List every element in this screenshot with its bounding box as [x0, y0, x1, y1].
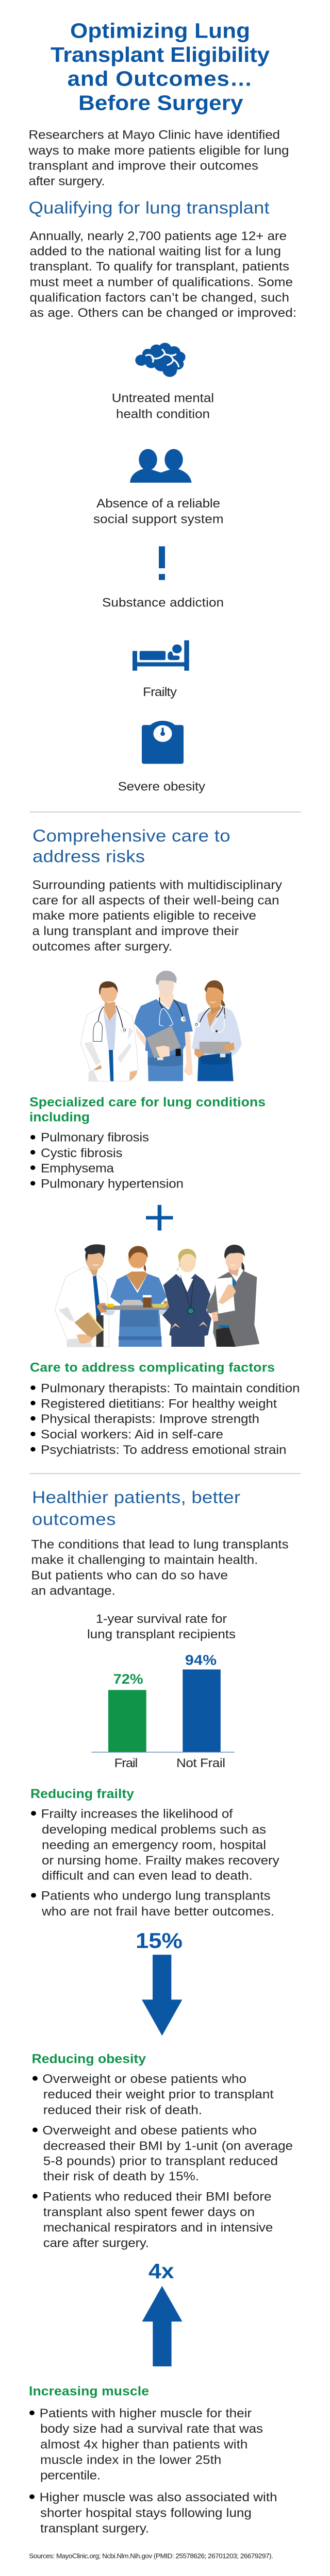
panel: qualifying for lung transplant — [29, 198, 296, 793]
list: lung conditions: Pulmonary hypertension — [41, 1177, 184, 1191]
text block: multidisciplinary care: outcomes after surgery. — [32, 940, 172, 954]
list: care team — [30, 1381, 300, 1457]
illustration: three clinicians — [81, 971, 241, 1081]
text block: multidisciplinary care — [32, 878, 282, 954]
list: reducing obesity: care after surgery. — [43, 2236, 149, 2250]
value: 72 percent: 72% — [113, 1671, 143, 1687]
text block: qualifying: transplant. To qualify for transplant, patients — [30, 260, 289, 274]
illustration: four care team members — [55, 1244, 259, 1347]
text block: qualifying — [30, 229, 296, 320]
text block: multidisciplinary care: make more patients eligible to receive — [32, 909, 256, 923]
icon: bed — [133, 640, 189, 671]
title: Optimizing Lung — [70, 19, 250, 42]
list: reducing obesity: decreased their BMI by 1-unit (on average — [43, 2139, 293, 2153]
list: reducing obesity: mechanical respirators and in intensive — [43, 2221, 273, 2234]
list: care team: Physical therapists: Improve strength — [41, 1412, 259, 1426]
text block: qualifying: must meet a number of qualifications. Some — [30, 276, 293, 289]
list: reducing frailty: needing an emergency room, hospital — [42, 1838, 266, 1852]
list: lung conditions: Pulmonary fibrosis — [41, 1130, 149, 1144]
bar chart: survival rate — [87, 1612, 236, 1770]
subheading: specialized care: including — [29, 1110, 90, 1124]
label: severe obesity: Severe obesity — [118, 779, 205, 793]
title: Before Surgery — [78, 91, 243, 114]
doctor in white coat — [81, 981, 138, 1081]
intro text: after surgery. — [29, 175, 105, 188]
list: increasing muscle: shorter hospital stays following lung — [40, 2506, 252, 2520]
list: increasing muscle: percentile. — [40, 2468, 101, 2482]
list: care team: Registered dietitians: For healthy weight — [41, 1397, 277, 1411]
label: substance addiction: Substance addiction — [102, 596, 224, 609]
heading: comprehensive care: Comprehensive care to — [32, 826, 230, 845]
panel: comprehensive care — [29, 826, 300, 1457]
text block: qualifying: qualification factors can’t be changed, such — [30, 291, 289, 304]
title — [51, 19, 270, 114]
heading: healthier patients — [32, 1488, 240, 1529]
label: social support: Absence of a reliable — [96, 497, 220, 511]
list: reducing frailty: difficult and can even lead to death. — [42, 1869, 253, 1883]
list: reducing obesity: Overweight and obese patients who — [42, 2124, 257, 2138]
list: increasing muscle — [29, 2406, 277, 2535]
list: lung conditions — [30, 1130, 184, 1191]
subheading: reducing obesity: Reducing obesity — [32, 2052, 146, 2066]
label: mental health — [112, 391, 214, 421]
heading: healthier patients: outcomes — [32, 1510, 116, 1529]
list: reducing frailty — [31, 1807, 279, 1919]
text block: multidisciplinary care: care for all aspects of their well-being can — [32, 893, 279, 907]
icon: exclamation mark — [159, 546, 165, 580]
arrow: up — [142, 2286, 183, 2366]
list: reducing frailty: Frailty increases the likelihood of — [41, 1807, 233, 1821]
list: reducing obesity: transplant also spent fewer days on — [43, 2206, 255, 2219]
arrow: down — [142, 1955, 183, 2036]
list: reducing obesity: reduced their weight prior to transplant — [43, 2088, 274, 2102]
list: reducing frailty: or nursing home. Frailty makes recovery — [42, 1854, 279, 1868]
label: mental health: Untreated mental — [112, 391, 214, 405]
axis label: not frail: Not Frail — [176, 1756, 225, 1770]
list: reducing obesity: reduced their risk of death. — [43, 2103, 202, 2117]
heading: healthier patients: Healthier patients, better — [32, 1488, 240, 1507]
title: Transplant Eligibility — [51, 43, 270, 66]
bar: frail — [108, 1690, 146, 1752]
label: social support — [93, 497, 224, 526]
list: increasing muscle: almost 4x higher than patients with — [40, 2437, 248, 2451]
list: care team: Psychiatrists: To address emotional strain — [41, 1443, 287, 1457]
list: increasing muscle: body size had a survival rate that was — [40, 2422, 263, 2436]
intro text — [28, 128, 289, 188]
sources footnote: Sources: MayoClinic.org; Ncbi.Nlm.Nih.gov (PMID: 25578626; 26701203; 26679297). — [29, 2552, 273, 2560]
text block: qualifying: added to the national waiting list for a lung — [30, 245, 281, 259]
intro text: Researchers at Mayo Clinic have identified — [29, 128, 280, 142]
label: social support: social support system — [93, 512, 224, 526]
social worker in grey blazer — [207, 1245, 259, 1347]
heading: comprehensive care — [32, 826, 230, 866]
subheading: specialized care: Specialized care for lung conditions — [29, 1095, 266, 1109]
list: reducing obesity: their risk of death by 15%. — [43, 2170, 199, 2183]
chart title: 1-year survival rate for — [96, 1612, 227, 1626]
list: care team: Pulmonary therapists: To maintain condition — [41, 1381, 300, 1395]
text block: multidisciplinary care: a lung transplant and improve their — [32, 924, 239, 938]
doctor with folder — [55, 1244, 109, 1347]
text block: qualifying: Annually, nearly 2,700 patients age 12+ are — [30, 229, 287, 243]
list: reducing frailty: developing medical problems such as — [42, 1823, 266, 1837]
doctor in blouse and skirt — [192, 980, 241, 1081]
list: increasing muscle: muscle index in the lower 25th — [40, 2453, 221, 2467]
title: and Outcomes… — [68, 67, 253, 90]
icon: brain — [135, 343, 186, 377]
subheading: specialized care — [29, 1095, 266, 1124]
list: reducing obesity: Patients who reduced their BMI before — [43, 2190, 272, 2204]
list: lung conditions: Cystic fibrosis — [41, 1146, 123, 1160]
chart title: lung transplant recipients — [87, 1628, 236, 1641]
value: 94 percent: 94% — [185, 1652, 217, 1668]
list: care team: Social workers: Aid in self-care — [41, 1428, 223, 1442]
label: frailty: Frailty — [143, 685, 177, 699]
icon: weight scale — [142, 721, 184, 764]
intro text: transplant and improve their outcomes — [29, 159, 258, 173]
heading: qualifying: Qualifying for lung transplant — [29, 198, 270, 217]
text block: advantage: make it challenging to maintain health. — [31, 1553, 258, 1567]
axis label: frail: Frail — [114, 1756, 138, 1770]
list: reducing obesity: 5-8 pounds) prior to transplant reduced — [43, 2154, 278, 2168]
text block: advantage: But patients who can do so have — [31, 1569, 228, 1582]
subheading: increasing muscle: Increasing muscle — [29, 2384, 149, 2398]
nurse in blue scrubs — [135, 971, 193, 1081]
text block: qualifying: as age. Others can be changed or improved: — [30, 306, 296, 320]
text block: advantage — [31, 1538, 289, 1598]
stat: 15 percent: 15% — [136, 1928, 183, 1953]
subheading: reducing frailty: Reducing frailty — [30, 1787, 135, 1801]
text block: advantage: an advantage. — [31, 1584, 116, 1598]
dietitian with tray — [97, 1246, 171, 1347]
list: reducing obesity — [32, 2072, 293, 2250]
list: increasing muscle: Patients with higher muscle for their — [40, 2406, 252, 2420]
intro text: ways to make more patients eligible for lung — [28, 144, 289, 158]
list: reducing obesity: Overweight or obese patients who — [42, 2072, 246, 2086]
panel: healthier patients — [29, 1488, 293, 2560]
heading: comprehensive care: address risks — [32, 847, 145, 866]
subheading: complicating factors: Care to address complicating factors — [30, 1361, 275, 1375]
bar: not frail — [183, 1669, 221, 1752]
physical therapist in navy jacket — [162, 1249, 211, 1347]
icon: two people — [130, 449, 192, 483]
text block: advantage: The conditions that lead to lung transplants — [31, 1538, 289, 1551]
text block: multidisciplinary care: Surrounding patients with multidisciplinary — [32, 878, 282, 892]
list: reducing frailty: Patients who undergo lung transplants — [41, 1889, 270, 1903]
stat: 4x: 4x — [148, 2260, 174, 2283]
list: increasing muscle: transplant surgery. — [40, 2522, 149, 2535]
list: reducing frailty: who are not frail have better outcomes. — [41, 1905, 274, 1919]
list: lung conditions: Emphysema — [41, 1161, 114, 1175]
chart title — [87, 1612, 236, 1641]
icon: plus sign — [146, 1205, 173, 1230]
list: increasing muscle: Higher muscle was also associated with — [40, 2490, 277, 2504]
label: mental health: health condition — [116, 407, 210, 421]
